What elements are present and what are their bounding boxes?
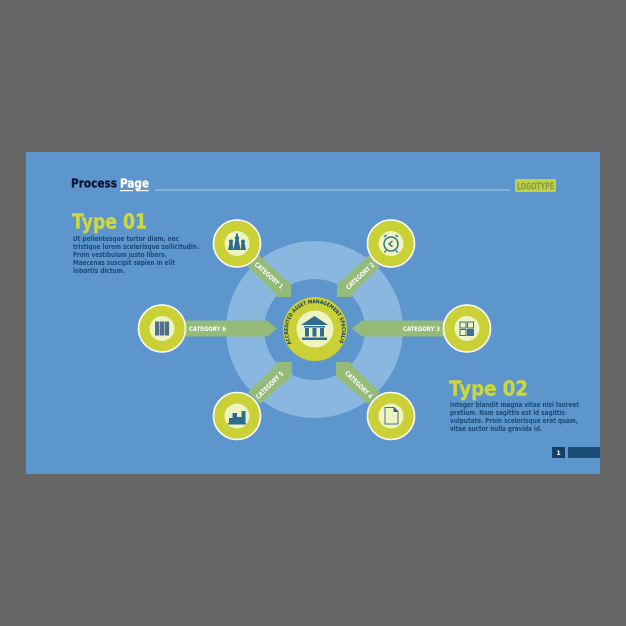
arrow: category 6: CATEGORY 6: [189, 325, 226, 333]
node: category 6 binders: [138, 305, 186, 352]
arrow: category 6: [184, 320, 277, 336]
arrow: category 4: CATEGORY 4: [343, 369, 374, 401]
text block: type 02: Type 02: [449, 376, 528, 400]
node: category 3 calculator: [444, 305, 490, 352]
text block: type 01: Maecenas suscipit sapien in elit: [73, 259, 176, 267]
text block: type 02: vulputate. Proin scelerisque erat quam,: [450, 417, 578, 425]
header title: Page: [120, 176, 149, 190]
icon: document: [385, 408, 398, 424]
text block: type 02: pretium. Nam sagittis est id sagittis: [450, 409, 565, 417]
icon: chess pieces: [228, 234, 246, 250]
text block: type 01: [72, 210, 199, 275]
text block: type 01: Type 01: [72, 210, 147, 234]
curved label: ACCREDITED ASSET MANAGEMENT SPECIALIST: [284, 299, 346, 344]
icon: bars: [228, 411, 246, 424]
node: category 5 bar chart: [214, 392, 260, 440]
page number: [552, 447, 600, 458]
blue panel: [26, 152, 600, 474]
text block: type 01: tristique lorem scelerisque sollicitudin.: [73, 243, 199, 251]
ring: [245, 260, 384, 399]
text block: type 01: lobortis dictum.: [73, 267, 125, 275]
arrow: category 2: [337, 255, 380, 297]
logotype badge: LOGOTYPE: [517, 182, 554, 192]
arrow: category 1: CATEGORY 1: [253, 261, 285, 291]
icon: bank: [301, 316, 328, 340]
header title: Process: [71, 176, 117, 190]
arrow: category 3: CATEGORY 3: [403, 325, 440, 333]
header rule: [155, 190, 510, 191]
arrow: category 2: CATEGORY 2: [344, 261, 376, 291]
page number: 1: [556, 449, 561, 457]
icon: binders: [155, 322, 169, 336]
center badge: [283, 297, 347, 361]
header title: [71, 176, 149, 191]
logotype badge: [515, 179, 556, 192]
node: category 1 chess: [214, 220, 260, 267]
arrow: category 3: [352, 320, 444, 336]
text block: type 02: [449, 376, 580, 433]
text block: type 01: Proin vestibulum justo libero.: [73, 251, 167, 259]
node: category 4 document: [368, 392, 414, 440]
icon: calculator keys: [460, 322, 474, 336]
node: category 2 clock: [368, 220, 414, 267]
text block: type 02: Integer blandit magna vitae nisi laoreet: [450, 401, 580, 409]
icon: alarm clock: [384, 235, 398, 252]
arrow: category 5: CATEGORY 5: [254, 370, 286, 401]
text block: type 02: vitae auctor nulla gravida id.: [450, 425, 542, 433]
text block: type 01: Ut pellentesque tortor diam, nec: [73, 235, 179, 243]
arrow: category 4: [336, 362, 380, 404]
